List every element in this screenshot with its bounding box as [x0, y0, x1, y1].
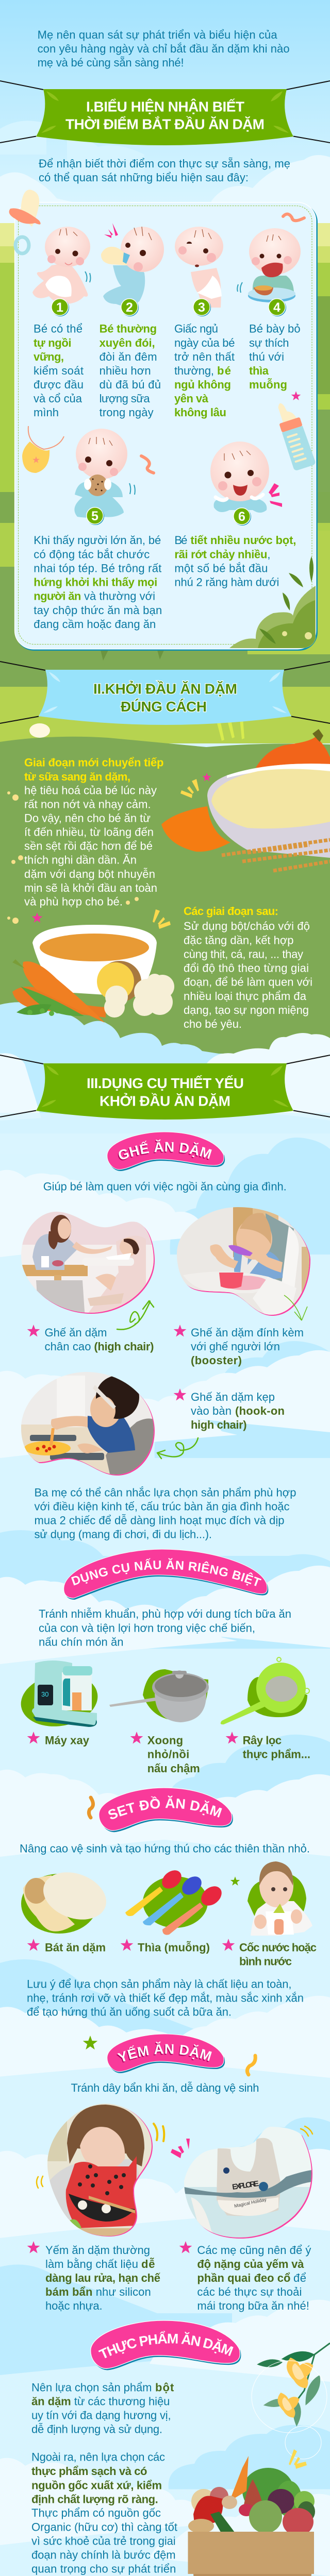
banner: section II — [0, 662, 330, 725]
baby 5 — [74, 429, 135, 518]
icon: pacifier — [9, 190, 41, 253]
section II text: transition stage — [24, 756, 164, 908]
meal set lead text: Nâng cao vệ sinh và tạo hứng thú cho các thiên thần nhỏ. — [20, 1842, 310, 1855]
high chair type 3: (hook-on — [235, 1404, 285, 1417]
bib note 2: để — [293, 2272, 306, 2284]
meal set note: để tạo hứng thú ăn uống suốt cả bữa ăn. — [27, 2005, 232, 2018]
cooking tool labels: thực phẩm... — [243, 1748, 310, 1761]
sign 4 text: Bé bày bỏ — [249, 323, 301, 335]
sign 5 text: và thường với — [84, 590, 155, 603]
number badges 5 and 6: 6 — [238, 510, 245, 524]
star — [230, 1876, 240, 1886]
image: box of vegetables — [188, 2456, 315, 2576]
photo: bib in water — [180, 2123, 315, 2241]
section II text: later stages: Các giai đoạn sau: — [184, 905, 278, 918]
banner: section I: THỜI ĐIỂM BẮT ĐẦU ĂN DẶM — [65, 116, 265, 132]
cooking tools lead text — [39, 1607, 291, 1648]
sign 4 text: thú với — [249, 350, 284, 363]
section II text: transition stage: sền sệt rồi đặc hơn để bé — [24, 839, 153, 852]
squiggle — [141, 456, 154, 473]
sign 6 text: , — [267, 548, 271, 561]
section II text: transition stage: hệ tiêu hoá của bé lúc này — [24, 784, 157, 797]
sign 3 text: trở nên thất — [174, 350, 235, 363]
high chair type 2: với ghế người lớn — [191, 1340, 280, 1353]
high chair advice text: Ba mẹ có thể cân nhắc lựa chọn sản phẩm phù hợp — [34, 1486, 296, 1499]
section II text: transition stage: Giai đoạn mới chuyển tiếp — [24, 756, 164, 769]
sign 3 text: yên và — [174, 392, 209, 405]
sign 1 text: được đầu — [34, 378, 84, 391]
cooking tool labels: Máy xay — [45, 1734, 90, 1747]
photo: baby in booster seat — [175, 1206, 315, 1319]
meal set labels: Cốc nước hoặc — [239, 1941, 317, 1954]
number badges: 1 — [56, 300, 63, 315]
photo: toddler with ladybug bib — [44, 2102, 155, 2239]
section II text: later stages: đoạn, để bé làm quen với — [184, 976, 312, 989]
badge: bib: YẾM ĂN DẶM — [117, 2043, 209, 2063]
number badges 5 and 6: 5 — [91, 509, 98, 523]
bib note 1: làm bằng chất liệu — [45, 2258, 138, 2270]
star — [83, 2036, 97, 2049]
motion marks — [37, 2124, 312, 2188]
sign 1 text: mình — [34, 406, 59, 419]
cooking tool labels: nấu chậm — [147, 1762, 200, 1775]
blue clouds — [0, 1138, 330, 2576]
sign 6 text: nhú 2 răng hàm dưới — [174, 576, 279, 589]
sign 3 text: thường, — [174, 364, 214, 377]
badge: food: THỰC PHẨM ĂN DẶM — [98, 2331, 234, 2359]
sign 2 text: xuyên đói, — [100, 336, 155, 349]
meadow — [0, 223, 330, 1066]
sign 3 text: ngày của bé — [174, 336, 235, 349]
food text: Ngoài ra, nên lựa chọn các — [31, 2451, 165, 2464]
badge: bib: YẾM ĂN DẶM — [117, 2041, 212, 2062]
sign 2 text: đòi ăn đêm — [100, 350, 157, 363]
sign 6 text: rãi rớt chảy nhiều — [174, 548, 267, 561]
food text: đoạn này chính là bước đệm — [31, 2548, 176, 2561]
image: saucepan — [109, 1669, 209, 1722]
banner: section I: I.BIỂU HIỆN NHẬN BIẾT — [86, 99, 244, 115]
banner: section III: III.DỤNG CỤ THIẾT YẾU — [87, 1075, 244, 1091]
section II text: later stages: đổi độ thô theo từng giai — [184, 962, 309, 975]
section II text: later stages: đặc tăng dần, kết hợp — [184, 934, 294, 946]
meal set labels: Thìa (muỗng) — [138, 1941, 210, 1954]
food text: vì sức khoẻ của trẻ trong giai — [31, 2534, 176, 2547]
section II text: later stages: nhiều loại thực phẩm đa — [184, 990, 307, 1003]
high chair type 3: vào bàn — [191, 1404, 232, 1417]
banner: section III — [0, 1055, 330, 1120]
section I lead text — [39, 157, 290, 184]
sign 3 text: Giấc ngủ — [174, 323, 218, 335]
high chair type 1: (high chair) — [94, 1340, 154, 1353]
food text: ăn dặm — [31, 2395, 71, 2408]
image: pumpkin and porridge bowl — [161, 729, 330, 871]
meal set labels — [27, 1939, 317, 1968]
badge: meal set — [98, 1787, 233, 1832]
image: vegetable soup bowl — [12, 925, 174, 1023]
high chair advice text: mua 2 chiếc để dễ dàng linh hoạt mục đích và dịp — [34, 1514, 285, 1527]
image: strainer — [221, 1657, 309, 1724]
bib lead text: Tránh dây bẩn khi ăn, dễ dàng vệ sinh — [71, 2081, 259, 2094]
sign 5 text: có động tác bắt chước — [34, 548, 150, 561]
high chair type 2 — [174, 1325, 304, 1367]
sign 5 text: nhai tóp tép. Bé trông rất — [34, 562, 161, 574]
section II text: later stages: dạng, tạo sự ngon miệng — [184, 1004, 309, 1016]
baby 1 — [32, 227, 91, 304]
meal set note: Lưu ý để lựa chọn sản phẩm này là chất liệu an toàn, — [27, 1977, 292, 1990]
cooking tools lead text: của con và tiện lợi hơn trong việc chế biến, — [39, 1621, 255, 1634]
squiggle — [283, 214, 304, 221]
high chair type 3: Ghế ăn dặm kẹp — [191, 1391, 275, 1403]
high chair type 1: Ghế ăn dặm — [44, 1326, 107, 1339]
section II text: transition stage: từ sữa sang ăn dặm, — [24, 770, 130, 783]
high chair type 1: chân cao — [44, 1340, 91, 1353]
sign 2 text: nhiều hơn — [100, 364, 151, 377]
food text: định chất lượng rõ ràng. — [31, 2493, 158, 2505]
number badges: 4 — [273, 300, 280, 315]
badge: high chair — [107, 1131, 225, 1171]
sign 4 text: sự thích — [249, 336, 289, 349]
baby 2 — [101, 223, 164, 306]
sign 3 text: không lâu — [174, 406, 226, 419]
decoration: flowers and bubbles — [252, 2343, 330, 2469]
photo: bib in water: EXPLORE — [232, 2179, 259, 2192]
section II text: transition stage: Do vậy, nên cho bé ăn từ — [24, 812, 151, 825]
baby 4 — [237, 228, 301, 302]
sign 2 text: Bé thường — [100, 323, 157, 335]
high chair advice text — [34, 1486, 296, 1541]
icon: bib — [22, 426, 64, 473]
baby 6 — [210, 442, 282, 513]
sign 2 text — [100, 323, 161, 419]
number badges: 2 — [126, 300, 133, 315]
bib note 1: như silicon — [96, 2285, 151, 2298]
image: baby food blender — [16, 1660, 102, 1732]
arrow — [284, 1295, 307, 1320]
badge: cooking tools: DỤNG CỤ NẤU ĂN RIÊNG BIỆT — [71, 1558, 262, 1586]
high chair type 2: (booster) — [191, 1354, 242, 1367]
sign 1 text: kiểm soát — [34, 364, 84, 377]
bib note 1: dàng lau rửa, hạn chế — [45, 2272, 161, 2284]
section I lead text: có thể quan sát những biểu hiện sau đây: — [39, 171, 249, 184]
section II text: transition stage: thích nghi dần dần. Ăn — [24, 854, 137, 867]
section II text: transition stage: mịn sẽ là khởi đầu an toàn — [24, 882, 157, 894]
badge: high chair: GHẾ ĂN DẶM — [119, 1140, 212, 1159]
badge: food — [90, 2320, 241, 2370]
photo: toddler in hook-on chair — [21, 1372, 155, 1476]
cooking tool labels: Rây lọc — [243, 1734, 282, 1747]
bib note 1: bám bẩn — [45, 2285, 92, 2298]
high chair type 2: Ghế ăn dặm đính kèm — [191, 1326, 304, 1339]
food text: Organic (hữu cơ) thì càng tốt — [31, 2520, 177, 2533]
high chair type 1 — [27, 1325, 154, 1353]
bush decoration — [229, 556, 316, 648]
sign 6 text — [174, 534, 296, 589]
food text: Thực phẩm có nguồn gốc — [31, 2506, 161, 2519]
sign 2 text: dù đã bú đủ — [100, 378, 161, 391]
cooking tools lead text: nấu chín món ăn — [39, 1635, 124, 1648]
sign 4 text: muỗng — [249, 378, 287, 391]
sign 6 text: một số bé bắt đầu — [174, 562, 268, 574]
cooking tool labels — [27, 1732, 310, 1775]
sign 1 text: tự ngồi — [34, 336, 71, 349]
cooking tool labels: Xoong — [147, 1734, 183, 1747]
sign 4 text — [249, 323, 301, 391]
number badges 5 and 6 — [86, 507, 251, 526]
food text: thực phẩm sạch và có — [31, 2465, 147, 2478]
sign 5 text: Khi thấy người lớn ăn, bé — [34, 534, 161, 547]
badge: bib — [107, 2034, 225, 2073]
sign 5 text: người ăn — [34, 590, 81, 603]
food text: bột — [155, 2381, 174, 2394]
bib note 2: mái trong bữa ăn nhé! — [197, 2299, 309, 2312]
arrow — [117, 1301, 154, 1330]
baby 3 — [175, 227, 223, 308]
bib note 1 — [27, 2241, 161, 2312]
banner: section III: KHỞI ĐẦU ĂN DẶM — [100, 1093, 230, 1109]
image: baby food blender: 30 — [41, 1690, 48, 1698]
sign 2 text: trong ngày — [100, 406, 154, 419]
decorations — [7, 773, 211, 929]
sign 5 text: đang cầm hoặc đang ăn — [34, 618, 156, 631]
bib note 1: hoặc nhựa. — [45, 2299, 103, 2312]
intro text: mẹ và bé cùng sẵn sàng nhé! — [38, 56, 184, 69]
banner: section II: II.KHỞI ĐẦU ĂN DẶM — [93, 681, 237, 697]
sign 5 text — [34, 534, 162, 631]
bib note 2: Các mẹ cũng nên để ý — [197, 2244, 311, 2257]
sign 5 text: tay chộp thức ăn mà bạn — [34, 604, 162, 617]
photo: bib in water: Magical Holiday — [234, 2197, 267, 2209]
sign 1 text: và cổ của — [34, 392, 82, 405]
high chair lead text: Giúp bé làm quen với việc ngồi ăn cùng gia đình. — [43, 1180, 287, 1193]
sky below the meadow — [0, 1002, 330, 1133]
arrow — [157, 1438, 198, 1459]
meal set labels: Bát ăn dặm — [45, 1941, 106, 1954]
squiggle — [89, 1798, 93, 1818]
sign 3 text — [174, 323, 235, 419]
number badges — [51, 298, 286, 316]
badge: high chair: GHẾ ĂN DẶM — [118, 1141, 209, 1160]
bib note 1: dễ — [141, 2258, 155, 2270]
high chair advice text: sử dụng (mang đi chơi, đi du lịch...). — [34, 1528, 212, 1541]
badge: meal set: SET ĐỒ ĂN DẶM — [108, 1795, 222, 1819]
sign 6 text: Bé — [174, 534, 187, 547]
section II text: transition stage: ít đến nhiều, từ loãng đến — [24, 826, 154, 839]
icon: feeding bottle — [273, 399, 316, 471]
sign 5 text: hứng khởi khi thấy mọi — [34, 576, 157, 589]
image: silicone spoons — [125, 1867, 225, 1935]
section I lead text: Để nhận biết thời điểm con thực sự sẵn sàng, mẹ — [39, 157, 290, 170]
food text: uy tín với đa dạng hương vị, — [31, 2409, 171, 2422]
bib note 2 — [179, 2241, 311, 2312]
section II text: later stages: cho bé yêu. — [184, 1018, 242, 1030]
section II text: later stages: cùng thịt, cá, rau, ... thay — [184, 948, 303, 961]
sign 4 text: thìa — [249, 364, 269, 377]
high chair advice text: với điều kiện kinh tế, cấu trúc bàn ăn gia đình hoặc — [34, 1500, 290, 1513]
section II text: transition stage: dặm với dạng bột nhuyễn — [24, 868, 155, 880]
sign 6 text: tiết nhiều nước bọt, — [190, 534, 296, 547]
sign 1 text — [34, 323, 84, 419]
photo: baby with sippy cup — [248, 1861, 312, 1936]
sign 3 text: ngủ không — [174, 378, 231, 391]
sign 1 text: vững, — [34, 350, 64, 363]
meal set note — [27, 1977, 304, 2018]
squiggle — [247, 2056, 255, 2075]
banner: section I — [0, 81, 330, 145]
meal set note: nhẹ, tránh rơi vỡ và thiết kế đẹp mắt, màu sắc xinh xắn — [27, 1991, 304, 2004]
star — [291, 391, 301, 400]
section II text: transition stage: rất non nớt và nhạy cảm. — [24, 798, 151, 810]
food text: quan trọng cho sự phát triển — [31, 2562, 176, 2575]
intro text: Mẹ nên quan sát sự phát triển và biểu hiện của — [38, 28, 277, 41]
badge: cooking tools — [63, 1549, 268, 1600]
high chair type 3: high chair) — [191, 1418, 247, 1431]
sign 1 text: Bé có thể — [34, 323, 82, 335]
food text: Nên lựa chọn sản phẩm — [31, 2381, 152, 2394]
high chair type 3 — [174, 1388, 285, 1431]
food text — [31, 2381, 177, 2576]
cooking tool labels: nhỏ/nồi — [147, 1748, 189, 1761]
intro text — [38, 28, 290, 69]
cooking tools lead text: Tránh nhiễm khuẩn, phù hợp với dung tích bữa ăn — [39, 1607, 291, 1620]
meal set labels: bình nước — [239, 1955, 292, 1968]
food text: từ các thương hiệu — [74, 2395, 170, 2408]
bib note 2: độ nặng của yếm và — [197, 2258, 304, 2270]
bib note 2: các bé thực sự thoải — [197, 2285, 302, 2298]
section II text: later stages — [184, 905, 312, 1030]
sign 3 text: bé — [217, 364, 231, 377]
intro text: con yêu hàng ngày và chỉ bắt đầu ăn dặm khi nào — [38, 42, 290, 55]
photo: mother feeding baby in high chair — [21, 1212, 155, 1314]
bib note 2: phần quai đeo cổ — [197, 2272, 290, 2284]
panel: signs of readiness — [9, 190, 318, 651]
bib note 1: Yếm ăn dặm thường — [45, 2244, 150, 2257]
section II text: later stages: Sử dụng bột/cháo với độ — [184, 920, 310, 933]
sign 2 text: lượng sữa — [100, 392, 150, 405]
number badges: 3 — [198, 300, 205, 315]
pale clouds — [0, 1170, 330, 2576]
food text: dễ định lượng và sử dụng. — [31, 2423, 162, 2436]
banner: section II: ĐÚNG CÁCH — [121, 699, 207, 715]
food text: nguồn gốc xuất xứ, kiểm — [31, 2479, 162, 2492]
image: bowl with lid — [21, 1864, 113, 1934]
section II text: transition stage: và phù hợp cho bé. — [24, 895, 123, 908]
